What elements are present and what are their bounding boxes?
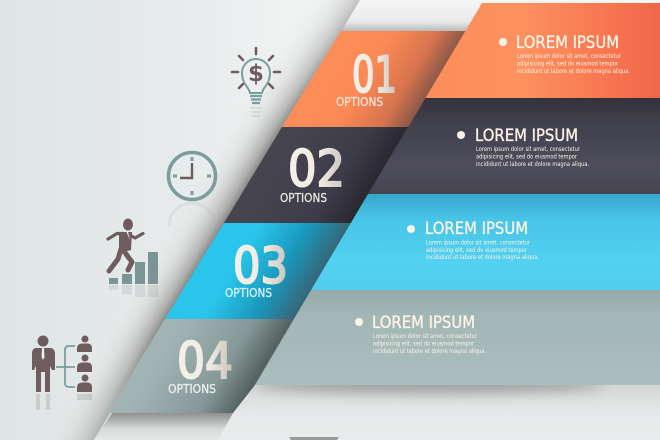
- icon: light bulb with dollar: $: [248, 61, 264, 87]
- number and label 04: OPTIONS: [168, 381, 216, 396]
- text block band 2: Lorem ipsum dolor sit amet, consectetur: [476, 146, 580, 153]
- text block band 3: [407, 219, 539, 261]
- shadow strip below panel 04: [94, 413, 233, 440]
- option panel 02: [224, 127, 416, 223]
- number and label 04: 04: [177, 332, 233, 390]
- text block band 3: Lorem ipsum dolor sit amet, consectetur: [426, 240, 530, 246]
- text block band 4: [355, 313, 486, 355]
- number and label 01: 01: [352, 46, 397, 104]
- text block band 4: incididunt ut labore et dolore magna aliqua.: [373, 348, 486, 355]
- text block band 2: adipisicing elit, sed do eiusmod tempor: [476, 154, 577, 160]
- cut-off element at bottom edge: [289, 437, 339, 440]
- option panel 03: [165, 223, 358, 319]
- soft shadow below band 4: [255, 377, 605, 393]
- text block band 3: LOREM IPSUM: [425, 219, 528, 238]
- text block band 1: [499, 33, 630, 75]
- icon: light bulb with dollar: [232, 48, 280, 116]
- text block band 3: incididunt ut labore et dolore magna aliqua.: [426, 254, 539, 261]
- band 1 orange: [426, 3, 660, 98]
- number and label 01: [336, 46, 397, 109]
- icon: runner climbing bars: [108, 218, 158, 297]
- text block band 2: LOREM IPSUM: [475, 126, 578, 145]
- bottom white sheet below the bands: [218, 385, 660, 440]
- text block band 1: Lorem ipsum dolor sit amet, consectetur: [517, 53, 621, 60]
- option panel 01: [282, 31, 472, 127]
- band 3 blue: [311, 194, 660, 290]
- number and label 01: OPTIONS: [336, 94, 383, 109]
- text block band 2: incididunt ut labore et dolore magna aliqua.: [476, 161, 589, 168]
- text block band 4: adipisicing elit, sed do eiusmod tempor: [373, 340, 474, 348]
- folded flap shading: [38, 0, 360, 440]
- number and label 02: 02: [288, 140, 345, 198]
- text block band 1: adipisicing elit, sed do eiusmod tempor: [517, 60, 618, 68]
- band 4 grey: [255, 290, 660, 385]
- band 2 dark: [368, 98, 660, 194]
- option panel 04: [108, 319, 300, 413]
- icon: manager and team: [32, 336, 92, 410]
- text block band 4: LOREM IPSUM: [372, 313, 475, 332]
- text block band 1: incididunt ut labore et dolore magna aliqua.: [517, 68, 630, 75]
- number and label 03: OPTIONS: [225, 285, 272, 300]
- top white strip behind first band: [341, 0, 660, 31]
- text block band 4: Lorem ipsum dolor sit amet, consectetur: [373, 333, 477, 340]
- text block band 1: LOREM IPSUM: [516, 33, 619, 52]
- icon: clock: [168, 152, 216, 226]
- number and label 03: 03: [233, 237, 288, 295]
- text block band 3: adipisicing elit, sed do eiusmod tempor: [426, 247, 527, 254]
- number and label 02: OPTIONS: [280, 190, 327, 205]
- text block band 2: [457, 126, 589, 168]
